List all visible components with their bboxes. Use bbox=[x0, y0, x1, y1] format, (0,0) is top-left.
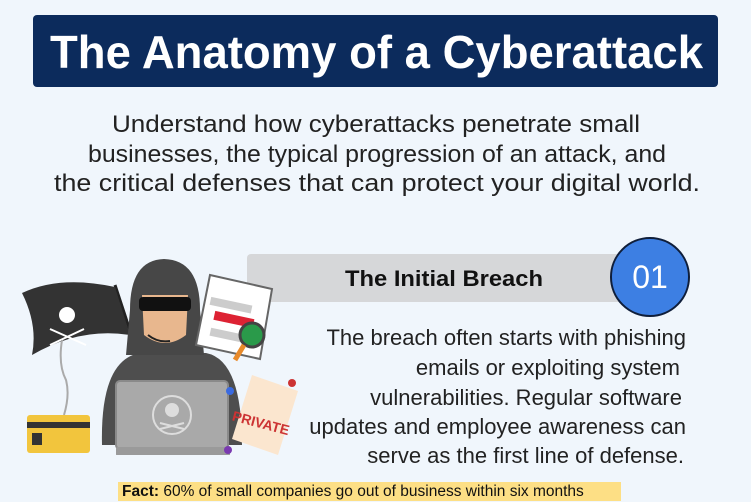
hacker figure bbox=[102, 259, 242, 445]
body text: serve as the first line of defense. bbox=[367, 443, 684, 468]
title bbox=[33, 15, 718, 87]
illustration: hacker bbox=[22, 259, 298, 455]
body text: emails or exploiting system bbox=[416, 355, 680, 380]
body text: updates and employee awareness can bbox=[309, 414, 686, 439]
icon: hooked card bbox=[27, 340, 90, 453]
subtitle: businesses, the typical progression of an attack, and bbox=[88, 141, 666, 168]
section heading bar: The Initial Breach bbox=[345, 266, 543, 291]
subtitle: the critical defenses that can protect your digital world. bbox=[54, 170, 700, 197]
subtitle bbox=[54, 111, 700, 197]
icon: private document: PRIVATE bbox=[231, 408, 291, 438]
body text: The breach often starts with phishing bbox=[326, 325, 686, 350]
number badge bbox=[610, 237, 690, 317]
section heading bar bbox=[247, 254, 647, 302]
subtitle: Understand how cyberattacks penetrate small bbox=[112, 111, 640, 138]
title: The Anatomy of a Cyberattack bbox=[50, 26, 703, 78]
body text bbox=[309, 325, 686, 468]
number badge: 01 bbox=[632, 259, 668, 295]
body text: vulnerabilities. Regular software bbox=[370, 385, 682, 410]
icon: pirate flag bbox=[22, 282, 138, 355]
laptop bbox=[116, 381, 230, 456]
fact banner: Fact: 60% of small companies go out of business within six months bbox=[122, 483, 584, 500]
icon: private document bbox=[224, 375, 298, 455]
icon: login window bbox=[196, 275, 272, 360]
